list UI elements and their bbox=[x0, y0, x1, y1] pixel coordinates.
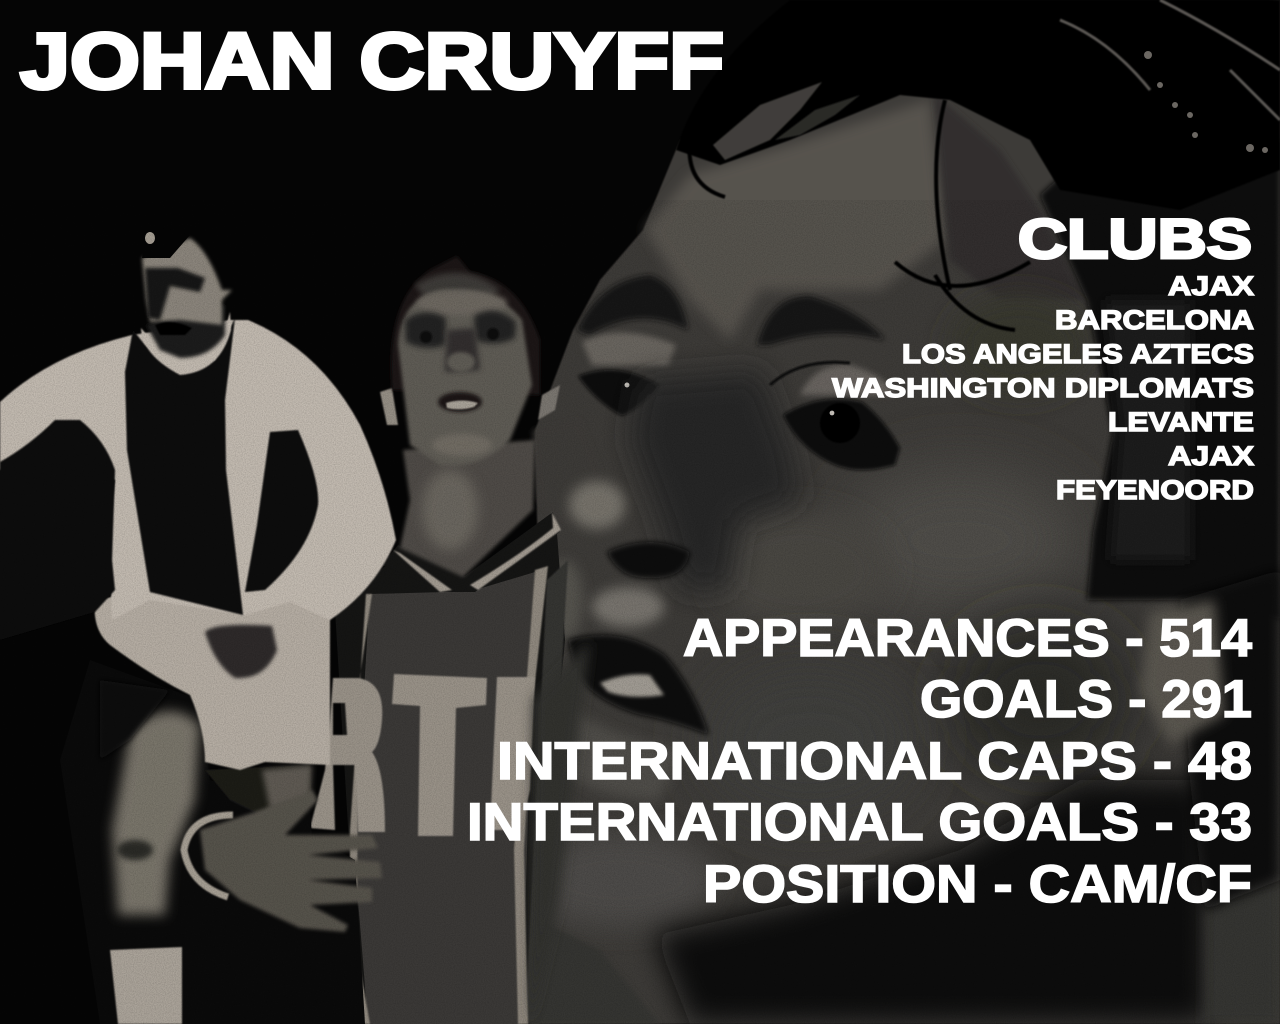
dark armpit bbox=[0, 420, 115, 640]
mouth bbox=[568, 635, 709, 735]
right eye bbox=[783, 399, 900, 470]
lit hair strands bbox=[713, 82, 822, 160]
hair bbox=[391, 256, 540, 395]
shirt blue panel bbox=[354, 572, 535, 1024]
face bbox=[142, 238, 232, 325]
right hair block bbox=[1040, 140, 1280, 620]
right arm gap bbox=[245, 430, 318, 592]
sock bbox=[110, 947, 182, 1024]
left eyelid bbox=[582, 333, 676, 366]
chin dark bbox=[146, 305, 225, 358]
cheek bbox=[840, 465, 1080, 615]
shorts bbox=[95, 590, 330, 770]
panel trim bbox=[350, 566, 548, 1024]
shirt letter T bbox=[392, 674, 487, 836]
nostril bbox=[607, 542, 690, 578]
right eye lid bbox=[800, 365, 895, 395]
left ear bbox=[380, 388, 398, 425]
stat: position: POSITION - CAM/CF bbox=[703, 855, 1252, 914]
teeth bbox=[600, 674, 664, 697]
left eye bbox=[578, 370, 660, 416]
shirt body right strip bbox=[525, 560, 568, 1024]
hair bbox=[142, 228, 190, 258]
club list: WASHINGTON DIPLOMATS bbox=[832, 373, 1254, 403]
chin light bbox=[432, 434, 492, 456]
nose shadow bbox=[445, 328, 480, 372]
mouth bbox=[155, 322, 192, 335]
stat: goals: GOALS - 291 bbox=[920, 670, 1252, 729]
shadow beside nose bbox=[630, 370, 800, 590]
title: JOHAN CRUYFF bbox=[20, 16, 724, 105]
brows and eye sockets bbox=[405, 311, 516, 348]
right ear bbox=[538, 385, 560, 420]
face bbox=[398, 289, 532, 466]
thigh speckled bbox=[112, 711, 200, 915]
heading: clubs: CLUBS bbox=[1018, 207, 1252, 270]
hair highlights bbox=[1060, 0, 1280, 120]
eye shadow bbox=[145, 268, 205, 320]
neck collar bbox=[141, 312, 231, 375]
right brow bbox=[757, 296, 885, 345]
left brow bbox=[577, 275, 688, 335]
cuff bbox=[184, 815, 233, 897]
club list: FEYENOORD bbox=[1056, 475, 1254, 505]
neck bbox=[400, 440, 535, 577]
club list: AJAX bbox=[1168, 271, 1254, 301]
right shirt shade bbox=[530, 640, 590, 1024]
stat: international caps: INTERNATIONAL CAPS - 48 bbox=[497, 732, 1252, 791]
far thigh bbox=[205, 765, 312, 815]
nose tip bbox=[569, 481, 625, 529]
shirt body bbox=[0, 320, 396, 620]
shirt letter I bbox=[490, 677, 535, 830]
hand bbox=[200, 790, 382, 932]
stripe bbox=[125, 318, 243, 615]
photo: middle player in PSG shirt bbox=[310, 256, 590, 1024]
mouth bbox=[438, 392, 482, 412]
collar trim bbox=[393, 512, 561, 592]
panel: clubs bbox=[832, 207, 1254, 505]
lower-right corner bbox=[1205, 880, 1280, 1024]
lower body shadow bbox=[60, 660, 365, 1024]
cheek dark under text bbox=[950, 620, 1130, 780]
stat: international goals: INTERNATIONAL GOALS - 33 bbox=[467, 793, 1252, 852]
collar dark band bbox=[382, 512, 560, 592]
left of nose, cheek shade bbox=[533, 420, 600, 525]
hands on shorts bbox=[205, 625, 277, 678]
face base bbox=[530, 0, 1280, 1024]
club list: LOS ANGELES AZTECS bbox=[902, 339, 1254, 369]
photo: large close-up face bbox=[525, 0, 1280, 1024]
club list bbox=[832, 271, 1254, 505]
temple bbox=[950, 295, 1090, 395]
forehead bbox=[417, 291, 507, 315]
lower lip bbox=[560, 700, 680, 800]
jaw shadow bbox=[655, 780, 1210, 1024]
chin bbox=[525, 834, 715, 926]
hair top bbox=[676, 0, 1280, 210]
right ear patch bbox=[1140, 600, 1225, 745]
loose hair strands on forehead bbox=[689, 100, 1030, 330]
shirt back bbox=[335, 520, 565, 1024]
club list: AJAX bbox=[1168, 441, 1254, 471]
panel: career statistics bbox=[467, 609, 1253, 914]
neck bbox=[530, 915, 660, 1024]
upper lip bbox=[592, 587, 664, 627]
forehead light bbox=[645, 100, 945, 340]
photo: left player in Ajax shirt bbox=[0, 228, 396, 1024]
forehead right section bbox=[934, 93, 1085, 300]
club list: BARCELONA bbox=[1055, 305, 1254, 335]
stat: appearances: APPEARANCES - 514 bbox=[683, 609, 1253, 668]
club list: LEVANTE bbox=[1108, 407, 1254, 437]
shirt letter R bbox=[310, 678, 385, 832]
